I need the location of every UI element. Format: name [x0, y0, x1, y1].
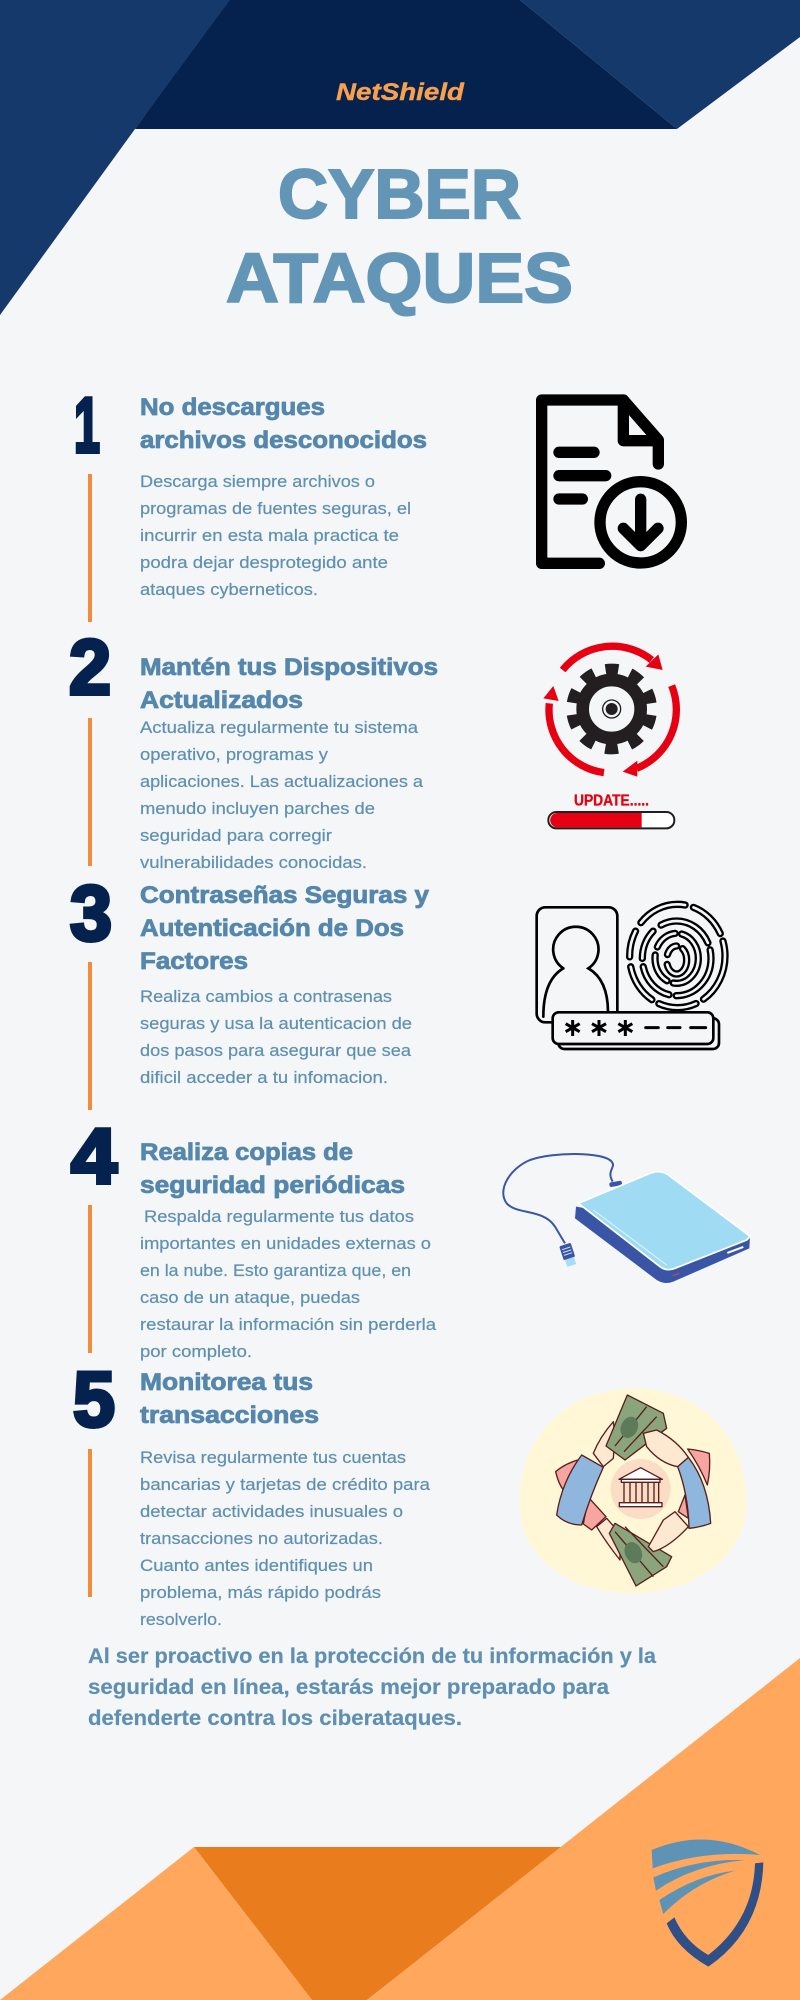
- body text 4: Respalda regularmente tus datos: [144, 1207, 414, 1226]
- heading 2: Actualizados: [140, 687, 303, 714]
- conclusion text: seguridad en línea, estarás mejor preparado para: [88, 1676, 609, 1699]
- connector bar 5: [88, 1449, 92, 1597]
- icon: fingerprint and password: [537, 904, 725, 1049]
- body text 2: [140, 718, 424, 872]
- body text 3: dos pasos para asegurar que sea: [140, 1041, 412, 1060]
- heading 1: No descargues: [140, 394, 325, 421]
- heading 3: Factores: [140, 948, 248, 975]
- heading 4: [140, 1139, 405, 1199]
- body text 5: [140, 1448, 431, 1629]
- heading 5: Monitorea tus: [140, 1369, 313, 1396]
- connector bar 1: [88, 474, 92, 622]
- body text 1: ataques cyberneticos.: [140, 580, 318, 599]
- number 2: 2: [69, 623, 111, 711]
- body text 1: [140, 472, 411, 599]
- body text 2: operativo, programas y: [140, 745, 329, 764]
- heading 4: seguridad periódicas: [140, 1172, 405, 1199]
- body text 5: problema, más rápido podrás: [140, 1583, 381, 1602]
- footer background shapes: [0, 1658, 800, 2000]
- body text 4: restaurar la información sin perderla: [140, 1315, 437, 1334]
- number 3: 3: [70, 869, 112, 957]
- title: CYBER: [278, 155, 521, 233]
- brand name: NetShield: [336, 79, 466, 106]
- body text 1: podra dejar desprotegido ante: [140, 553, 388, 572]
- heading 1: archivos desconocidos: [140, 427, 427, 454]
- header background shapes: [0, 0, 800, 315]
- body text 5: resolverlo.: [140, 1610, 222, 1629]
- conclusion text: defenderte contra los ciberataques.: [88, 1707, 462, 1730]
- body text 2: menudo incluyen parches de: [140, 799, 375, 818]
- connector bar 2: [88, 718, 92, 866]
- logo: shield: [652, 1839, 763, 1967]
- panel: step 2: [69, 623, 438, 872]
- body text 4: en la nube. Esto garantiza que, en: [140, 1261, 411, 1280]
- heading 3: Contraseñas Seguras y: [140, 882, 430, 909]
- body text 3: Realiza cambios a contrasenas: [140, 987, 392, 1006]
- body text 5: bancarias y tarjetas de crédito para: [140, 1475, 431, 1494]
- body text 3: [140, 987, 412, 1087]
- body text 4: caso de un ataque, puedas: [140, 1288, 360, 1307]
- heading 2: [140, 654, 438, 714]
- icon: external hard drive: [503, 1154, 750, 1283]
- heading 4: Realiza copias de: [140, 1139, 353, 1166]
- body text 5: Revisa regularmente tus cuentas: [140, 1448, 406, 1467]
- panel: step 3: [70, 869, 430, 1110]
- heading 3: Autenticación de Dos: [140, 915, 404, 942]
- conclusion text: Al ser proactivo en la protección de tu información y la: [88, 1645, 656, 1668]
- panel: step 5: [73, 1355, 431, 1629]
- conclusion text: [88, 1645, 656, 1730]
- panel: step 1: [74, 381, 427, 622]
- icon: file download: [542, 400, 681, 563]
- body text 5: detectar actividades inusuales o: [140, 1502, 403, 1521]
- heading 1: [140, 394, 427, 454]
- number 5: 5: [73, 1355, 115, 1443]
- panel: step 4: [71, 1112, 437, 1361]
- body text 3: seguras y usa la autenticacion de: [140, 1014, 412, 1033]
- heading 5: transacciones: [140, 1402, 319, 1429]
- body text 5: transacciones no autorizadas.: [140, 1529, 383, 1548]
- body text 1: Descarga siempre archivos o: [140, 472, 375, 491]
- body text 1: incurrir en esta mala practica te: [140, 526, 399, 545]
- body text 1: programas de fuentes seguras, el: [140, 499, 411, 518]
- body text 2: Actualiza regularmente tu sistema: [140, 718, 419, 737]
- number 1: 1: [74, 381, 100, 469]
- body text 3: dificil acceder a tu infomacion.: [140, 1068, 388, 1087]
- icon: bank and money hands: [519, 1388, 747, 1593]
- body text 5: Cuanto antes identifiques un: [140, 1556, 373, 1575]
- number 4: 4: [71, 1112, 117, 1200]
- body text 2: vulnerabilidades conocidas.: [140, 853, 367, 872]
- heading 5: [140, 1369, 319, 1429]
- body text 4: [140, 1207, 437, 1361]
- icon: gear update: [543, 646, 676, 828]
- body text 4: por completo.: [140, 1342, 252, 1361]
- body text 2: aplicaciones. Las actualizaciones a: [140, 772, 424, 791]
- heading 3: [140, 882, 430, 975]
- title: ATAQUES: [226, 239, 573, 317]
- body text 4: importantes en unidades externas o: [140, 1234, 431, 1253]
- icon: gear update: UPDATE.....: [574, 793, 649, 810]
- body text 2: seguridad para corregir: [140, 826, 332, 845]
- title: [226, 155, 573, 317]
- heading 2: Mantén tus Dispositivos: [140, 654, 438, 681]
- connector bar 3: [88, 962, 92, 1110]
- connector bar 4: [88, 1205, 92, 1353]
